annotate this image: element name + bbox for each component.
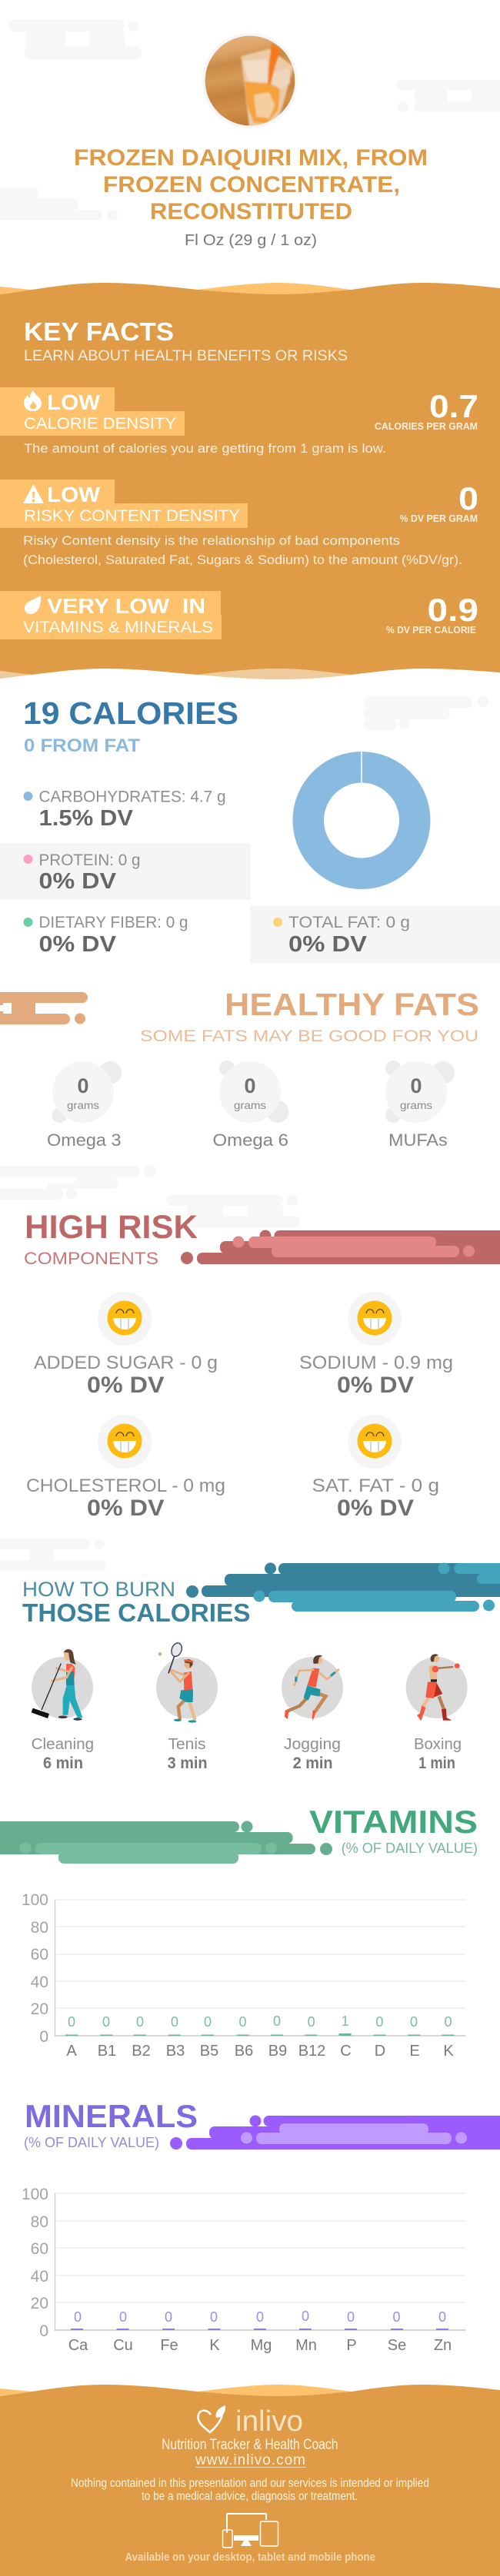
- activity: boxing: [406, 1654, 468, 1772]
- icon: grinning face: [98, 1292, 152, 1346]
- x axis labels: Mg: [251, 2337, 272, 2354]
- macro: total fat: [250, 906, 500, 963]
- vitamins subtitle: (% OF DAILY VALUE): [342, 1840, 478, 1856]
- risk: added sugar: [34, 1292, 218, 1398]
- y axis labels: 20: [31, 2295, 48, 2312]
- decoration: vitamins: [0, 1821, 332, 1864]
- fat: omega 6: grams: [234, 1099, 266, 1111]
- availability note: Available on your desktop, tablet and mobile phone: [125, 2551, 375, 2564]
- y axis and grid: [55, 2193, 465, 2331]
- x axis labels: B6: [235, 2043, 253, 2060]
- bar chart: minerals: [22, 2186, 465, 2354]
- macro: total fat: 0% DV: [288, 932, 368, 957]
- vitamins and minerals badge: VITAMINS & MINERALS: [23, 619, 213, 636]
- background cloud: high risk right: [166, 1195, 300, 1227]
- risky content value: 0: [458, 480, 478, 516]
- macro: carbohydrates: CARBOHYDRATES: 4.7 g: [38, 788, 226, 805]
- x axis labels: B1: [98, 2043, 116, 2060]
- donut chart: [308, 751, 415, 874]
- icon: devices: [223, 2514, 278, 2548]
- food photo: daiquiri glass: [202, 33, 298, 128]
- bar values: [74, 2309, 446, 2325]
- calorie density value: 0.7: [429, 388, 478, 424]
- icon: jogger: [282, 1655, 343, 1721]
- activity: jogging: [282, 1655, 343, 1772]
- y axis labels: 80: [31, 1919, 48, 1937]
- bar values: 0: [171, 2014, 178, 2030]
- x axis labels: [68, 2337, 452, 2354]
- y axis labels: 40: [31, 1973, 48, 1991]
- key facts heading: KEY FACTS: [24, 317, 174, 346]
- x axis labels: E: [409, 2043, 420, 2060]
- website link: www.inlivo.com: [195, 2452, 305, 2468]
- background cloud: burn calories: [0, 1539, 106, 1571]
- bar values: 0: [102, 2014, 110, 2030]
- decoration: healthy fats: [0, 992, 88, 1024]
- bar values: 0: [204, 2014, 212, 2030]
- x axis labels: Ca: [68, 2337, 88, 2354]
- risky content description: Risky Content density is the relationship of bad components: [23, 533, 400, 548]
- decoration: high risk: [181, 1230, 500, 1264]
- x axis labels: K: [209, 2337, 220, 2354]
- calorie density badge: LOW: [47, 390, 101, 414]
- y axis labels: 100: [22, 1891, 48, 1909]
- calorie density badge: [0, 387, 185, 436]
- background cloud: top left: [8, 19, 142, 59]
- risk: cholesterol: 0% DV: [87, 1495, 165, 1521]
- decoration: burn calories: [186, 1563, 500, 1612]
- minerals heading: MINERALS: [25, 2098, 198, 2134]
- macro: dietary fiber: 0% DV: [38, 932, 117, 957]
- risk: saturated fat: [312, 1415, 439, 1521]
- healthy fats heading: HEALTHY FATS: [225, 987, 479, 1022]
- icon: tennis player: [156, 1642, 218, 1723]
- fat: mufas: 0: [410, 1074, 422, 1097]
- fat: mufas: MUFAs: [388, 1130, 448, 1150]
- title: FROZEN CONCENTRATE,: [103, 172, 400, 198]
- x axis labels: P: [346, 2337, 357, 2354]
- risk: sodium: SODIUM - 0.9 mg: [299, 1353, 453, 1373]
- fat: omega 6: 0: [244, 1074, 256, 1097]
- activity: cleaning: Cleaning: [32, 1736, 94, 1753]
- y axis labels: 0: [39, 2322, 48, 2340]
- bar values: 0: [308, 2014, 315, 2030]
- icon: grinning face: [348, 1292, 402, 1346]
- x axis labels: Zn: [434, 2337, 452, 2354]
- bar values: 0: [68, 2014, 75, 2030]
- activity: boxing: 1 min: [418, 1754, 455, 1772]
- bars: [71, 2329, 448, 2330]
- y axis labels: 60: [31, 2240, 48, 2258]
- activity: tennis: 3 min: [168, 1754, 208, 1772]
- y axis labels: 60: [31, 1946, 48, 1964]
- activity: cleaning: 6 min: [43, 1754, 83, 1772]
- calorie density value: CALORIES PER GRAM: [375, 421, 478, 432]
- bar values: 0: [136, 2014, 144, 2030]
- bar values: 0: [273, 2013, 281, 2029]
- fat: omega 3: [47, 1061, 122, 1150]
- risky content density badge: [0, 480, 248, 528]
- risky content value: % DV PER GRAM: [400, 513, 478, 524]
- vitamins and minerals value: 0.9: [428, 592, 478, 628]
- icon: grinning face: [348, 1415, 402, 1469]
- risky content density badge: RISKY CONTENT DENSITY: [24, 507, 240, 525]
- panel: key facts: [0, 283, 500, 679]
- bar values: 0: [210, 2309, 218, 2325]
- x axis labels: B9: [268, 2043, 287, 2060]
- activity: tennis: Tenis: [168, 1736, 206, 1753]
- macro: dietary fiber: DIETARY FIBER: 0 g: [38, 914, 188, 931]
- macro: protein: 0% DV: [38, 869, 117, 894]
- bar values: 1: [342, 2013, 349, 2029]
- calories from fat: 0 FROM FAT: [24, 735, 140, 756]
- macro: carbohydrates: 1.5% DV: [38, 806, 134, 831]
- serving size: Fl Oz (29 g / 1 oz): [185, 232, 317, 249]
- x axis labels: B12: [298, 2043, 325, 2060]
- bar values: 0: [238, 2014, 247, 2030]
- fat: mufas: [385, 1061, 455, 1150]
- x axis labels: K: [443, 2043, 454, 2060]
- icon: grinning face: [98, 1415, 152, 1469]
- icon: person sweeping: [32, 1649, 93, 1721]
- fat: mufas: grams: [400, 1099, 432, 1111]
- background cloud: calories: [364, 696, 488, 730]
- footer: [0, 2385, 500, 2576]
- icon: warning: [23, 484, 44, 503]
- risk: cholesterol: CHOLESTEROL - 0 mg: [26, 1476, 225, 1496]
- bar values: 0: [375, 2014, 383, 2030]
- bar chart: vitamins: [22, 1891, 465, 2060]
- risky content description: (Cholesterol, Saturated Fat, Sugars & Sodium) to the amount (%DV/gr).: [23, 553, 462, 567]
- title: [74, 145, 428, 224]
- healthy fats subtitle: SOME FATS MAY BE GOOD FOR YOU: [140, 1027, 478, 1045]
- calorie density description: The amount of calories you are getting from 1 gram is low.: [24, 441, 386, 456]
- risk: added sugar: 0% DV: [87, 1373, 165, 1398]
- key facts subtitle: LEARN ABOUT HEALTH BENEFITS OR RISKS: [24, 347, 348, 364]
- title: FROZEN DAIQUIRI MIX, FROM: [74, 145, 428, 171]
- x axis labels: Cu: [113, 2337, 133, 2354]
- bar values: 0: [302, 2309, 309, 2324]
- macro: carbohydrates: [23, 788, 226, 831]
- activity: jogging: 2 min: [293, 1754, 333, 1772]
- activity: boxing: Boxing: [414, 1736, 462, 1753]
- y axis labels: 20: [31, 2000, 48, 2018]
- y axis labels: 100: [22, 2186, 48, 2203]
- x axis labels: [66, 2043, 454, 2060]
- logo wordmark: inlivo: [235, 2405, 303, 2438]
- minerals subtitle: (% OF DAILY VALUE): [24, 2134, 159, 2150]
- bar values: 0: [410, 2014, 418, 2030]
- decoration: minerals: [170, 2115, 500, 2149]
- title: RECONSTITUTED: [150, 199, 352, 224]
- icon: inlivo heart logo: [198, 2405, 225, 2432]
- high risk subtitle: COMPONENTS: [24, 1249, 158, 1268]
- disclaimer: Nothing contained in this presentation and our services is intended or implied: [71, 2477, 429, 2490]
- risky content value: [400, 480, 478, 524]
- icon: leaf: [25, 596, 41, 614]
- risk: sodium: [299, 1292, 453, 1398]
- background cloud: left of title: [0, 188, 118, 221]
- vitamins and minerals badge: [0, 591, 222, 639]
- background cloud: high risk left: [0, 1165, 156, 1200]
- vitamins heading: VITAMINS: [309, 1804, 478, 1840]
- risk: saturated fat: 0% DV: [337, 1495, 414, 1521]
- icon: boxer: [406, 1654, 468, 1721]
- macro: protein: PROTEIN: 0 g: [38, 851, 140, 869]
- y axis labels: [22, 2186, 48, 2340]
- activity: cleaning: [32, 1649, 94, 1772]
- bar values: 0: [74, 2309, 82, 2325]
- bar values: 0: [438, 2309, 446, 2325]
- risk: added sugar: ADDED SUGAR - 0 g: [34, 1353, 218, 1373]
- y axis and grid: [55, 1900, 465, 2037]
- x axis labels: B5: [200, 2043, 218, 2060]
- vitamins and minerals value: [386, 592, 478, 636]
- y axis labels: 80: [31, 2213, 48, 2231]
- fat: omega 6: Omega 6: [212, 1130, 288, 1150]
- bar values: 0: [392, 2309, 401, 2325]
- calories heading: 19 CALORIES: [23, 695, 238, 731]
- calorie density value: [375, 388, 478, 432]
- bar values: [68, 2013, 452, 2030]
- x axis labels: Fe: [160, 2337, 178, 2354]
- icon: flame: [24, 390, 42, 411]
- x axis labels: D: [375, 2043, 385, 2060]
- fat: omega 3: 0: [77, 1074, 89, 1097]
- high risk heading: HIGH RISK: [25, 1210, 198, 1246]
- bar values: 0: [165, 2309, 172, 2325]
- y axis labels: 0: [39, 2028, 48, 2046]
- disclaimer: [71, 2477, 429, 2503]
- disclaimer: to be a medical advice, diagnosis or treatment.: [142, 2490, 358, 2503]
- bar values: 0: [256, 2309, 264, 2325]
- background cloud: top right: [396, 80, 500, 112]
- tagline: Nutrition Tracker & Health Coach: [162, 2437, 338, 2453]
- macro: total fat: TOTAL FAT: 0 g: [288, 914, 410, 931]
- x axis labels: C: [340, 2043, 352, 2060]
- macro: protein: [0, 843, 251, 900]
- bars: [65, 2033, 454, 2036]
- fat: omega 6: [212, 1061, 289, 1150]
- risk: sodium: 0% DV: [337, 1373, 414, 1398]
- risky content density badge: LOW: [47, 483, 101, 506]
- bar values: 0: [119, 2309, 127, 2325]
- macro: dietary fiber: [23, 914, 188, 957]
- risk: cholesterol: [26, 1415, 225, 1521]
- x axis labels: Mn: [295, 2337, 317, 2354]
- activity: jogging: Jogging: [284, 1736, 341, 1753]
- risk: saturated fat: SAT. FAT - 0 g: [312, 1476, 439, 1496]
- risky content description: [23, 533, 462, 567]
- y axis labels: 40: [31, 2268, 48, 2286]
- burn heading line 1: HOW TO BURN: [22, 1578, 175, 1601]
- x axis labels: Se: [388, 2337, 406, 2354]
- fat: omega 3: Omega 3: [47, 1130, 122, 1150]
- y axis labels: [22, 1891, 48, 2046]
- calorie density badge: CALORIE DENSITY: [24, 415, 176, 433]
- vitamins and minerals badge: VERY LOW IN: [47, 594, 205, 618]
- activity: tennis: [156, 1642, 218, 1772]
- fat: omega 3: grams: [67, 1099, 99, 1111]
- x axis labels: B2: [132, 2043, 151, 2060]
- vitamins and minerals value: % DV PER CALORIE: [386, 625, 476, 636]
- bar values: 0: [347, 2309, 355, 2325]
- x axis labels: B3: [166, 2043, 185, 2060]
- x axis labels: A: [66, 2043, 77, 2060]
- bar values: 0: [444, 2014, 452, 2030]
- burn heading line 2: THOSE CALORIES: [22, 1598, 251, 1627]
